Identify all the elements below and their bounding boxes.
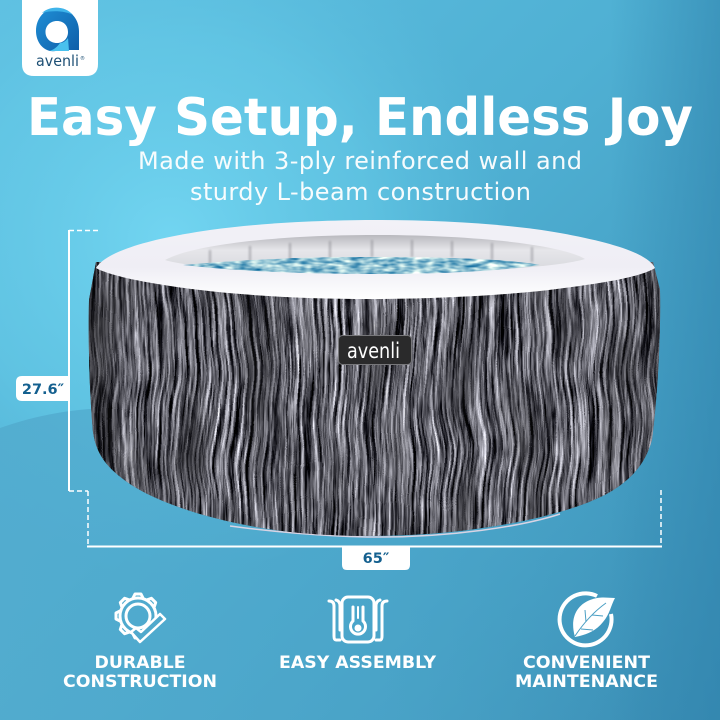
logo wordmark: avenli bbox=[36, 52, 79, 70]
icon: avenli logo mark bbox=[36, 8, 79, 51]
feature: easy assembly bbox=[279, 597, 437, 672]
label text: CONVENIENT bbox=[523, 653, 651, 672]
hot tub bbox=[80, 220, 670, 550]
label text bbox=[515, 653, 658, 691]
label text: MAINTENANCE bbox=[515, 672, 658, 691]
label text: CONSTRUCTION bbox=[63, 672, 217, 691]
logo card bbox=[22, 0, 98, 76]
label: width 65 inches: 65″ bbox=[363, 551, 390, 567]
feature: convenient maintenance bbox=[515, 593, 658, 691]
subtitle: sturdy L-beam construction bbox=[190, 178, 531, 206]
tub body: wood grain wall bbox=[88, 262, 660, 536]
interior creases bbox=[210, 240, 532, 264]
title: Easy Setup, Endless Joy bbox=[27, 88, 693, 148]
label text bbox=[63, 653, 217, 691]
label: width 65 inches bbox=[342, 547, 410, 570]
dimension: width line bbox=[87, 490, 662, 546]
tub rim bbox=[96, 220, 655, 299]
label: height 27.6 inches: 27.6″ bbox=[22, 382, 65, 398]
tub brand plate: avenli bbox=[347, 339, 400, 363]
subtitle bbox=[138, 147, 582, 206]
label text: EASY ASSEMBLY bbox=[279, 653, 437, 672]
tub interior wall bbox=[165, 235, 585, 273]
water bbox=[184, 257, 540, 274]
subtitle: Made with 3-ply reinforced wall and bbox=[138, 147, 582, 175]
tub shadow edge bbox=[230, 514, 560, 537]
icon: gear with check bbox=[116, 594, 165, 642]
feature: durable construction bbox=[63, 594, 217, 691]
label text: DURABLE bbox=[94, 653, 186, 672]
label: height 27.6 inches bbox=[16, 376, 69, 401]
logo registered mark: ® bbox=[80, 55, 85, 62]
icon: leaf in ring bbox=[560, 593, 615, 645]
icon: thermometer panel bbox=[329, 597, 387, 642]
dimension: height line bbox=[69, 230, 98, 491]
